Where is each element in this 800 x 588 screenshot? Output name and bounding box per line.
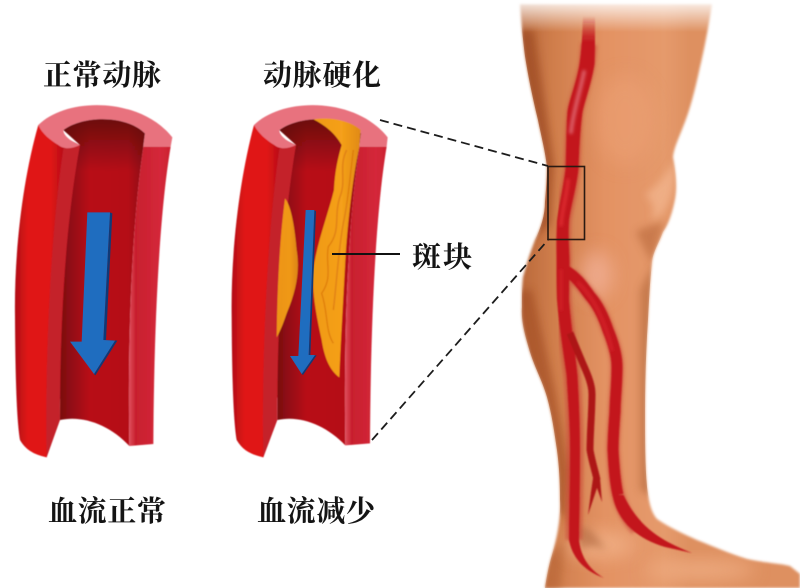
arrow shadow [302, 210, 317, 375]
plaque right [313, 118, 361, 377]
main artery [556, 16, 604, 578]
lumen shadow [60, 119, 145, 446]
right wall [129, 147, 171, 446]
label: plaque: 斑块 [412, 241, 472, 274]
panel: hardened artery [232, 105, 388, 457]
arteries [556, 16, 692, 578]
title: normal artery: 正常动脉 [43, 59, 161, 92]
left cut face [46, 145, 80, 457]
left wall [232, 125, 296, 457]
ankle shadow [578, 527, 606, 550]
title: arteriosclerosis: 动脉硬化 [263, 59, 381, 92]
leg silhouette [520, 4, 800, 588]
top fade [512, 0, 722, 32]
dashed zoom lines [372, 120, 548, 440]
anterior branch [565, 270, 618, 495]
left cut face [263, 145, 296, 457]
knee highlight [646, 166, 676, 218]
left wall [15, 125, 80, 457]
caption: normal blood flow: 血流正常 [48, 495, 166, 528]
blue arrow [290, 210, 315, 374]
artery highlights [561, 72, 612, 350]
lumen shadow [277, 119, 361, 445]
branch end to foot [612, 495, 692, 553]
right wall [345, 147, 387, 445]
plaque leader line [332, 253, 400, 255]
caption: reduced blood flow: 血流减少 [257, 495, 377, 528]
leg illustration [512, 0, 800, 588]
panel: normal artery [15, 105, 172, 457]
middle branch fork [588, 478, 602, 515]
zoom box on leg [548, 166, 584, 240]
middle branch [570, 333, 597, 480]
knee shadow [636, 222, 664, 264]
cross-section ring [38, 105, 172, 148]
artery glow [563, 44, 637, 540]
lumen [277, 119, 361, 445]
arrow shadow [94, 212, 117, 375]
cross-section ring [254, 105, 388, 148]
plaque left [277, 198, 298, 337]
leg shading [516, 30, 755, 588]
blue arrow [70, 212, 115, 374]
plaque folds [322, 150, 353, 343]
lumen [60, 119, 145, 446]
